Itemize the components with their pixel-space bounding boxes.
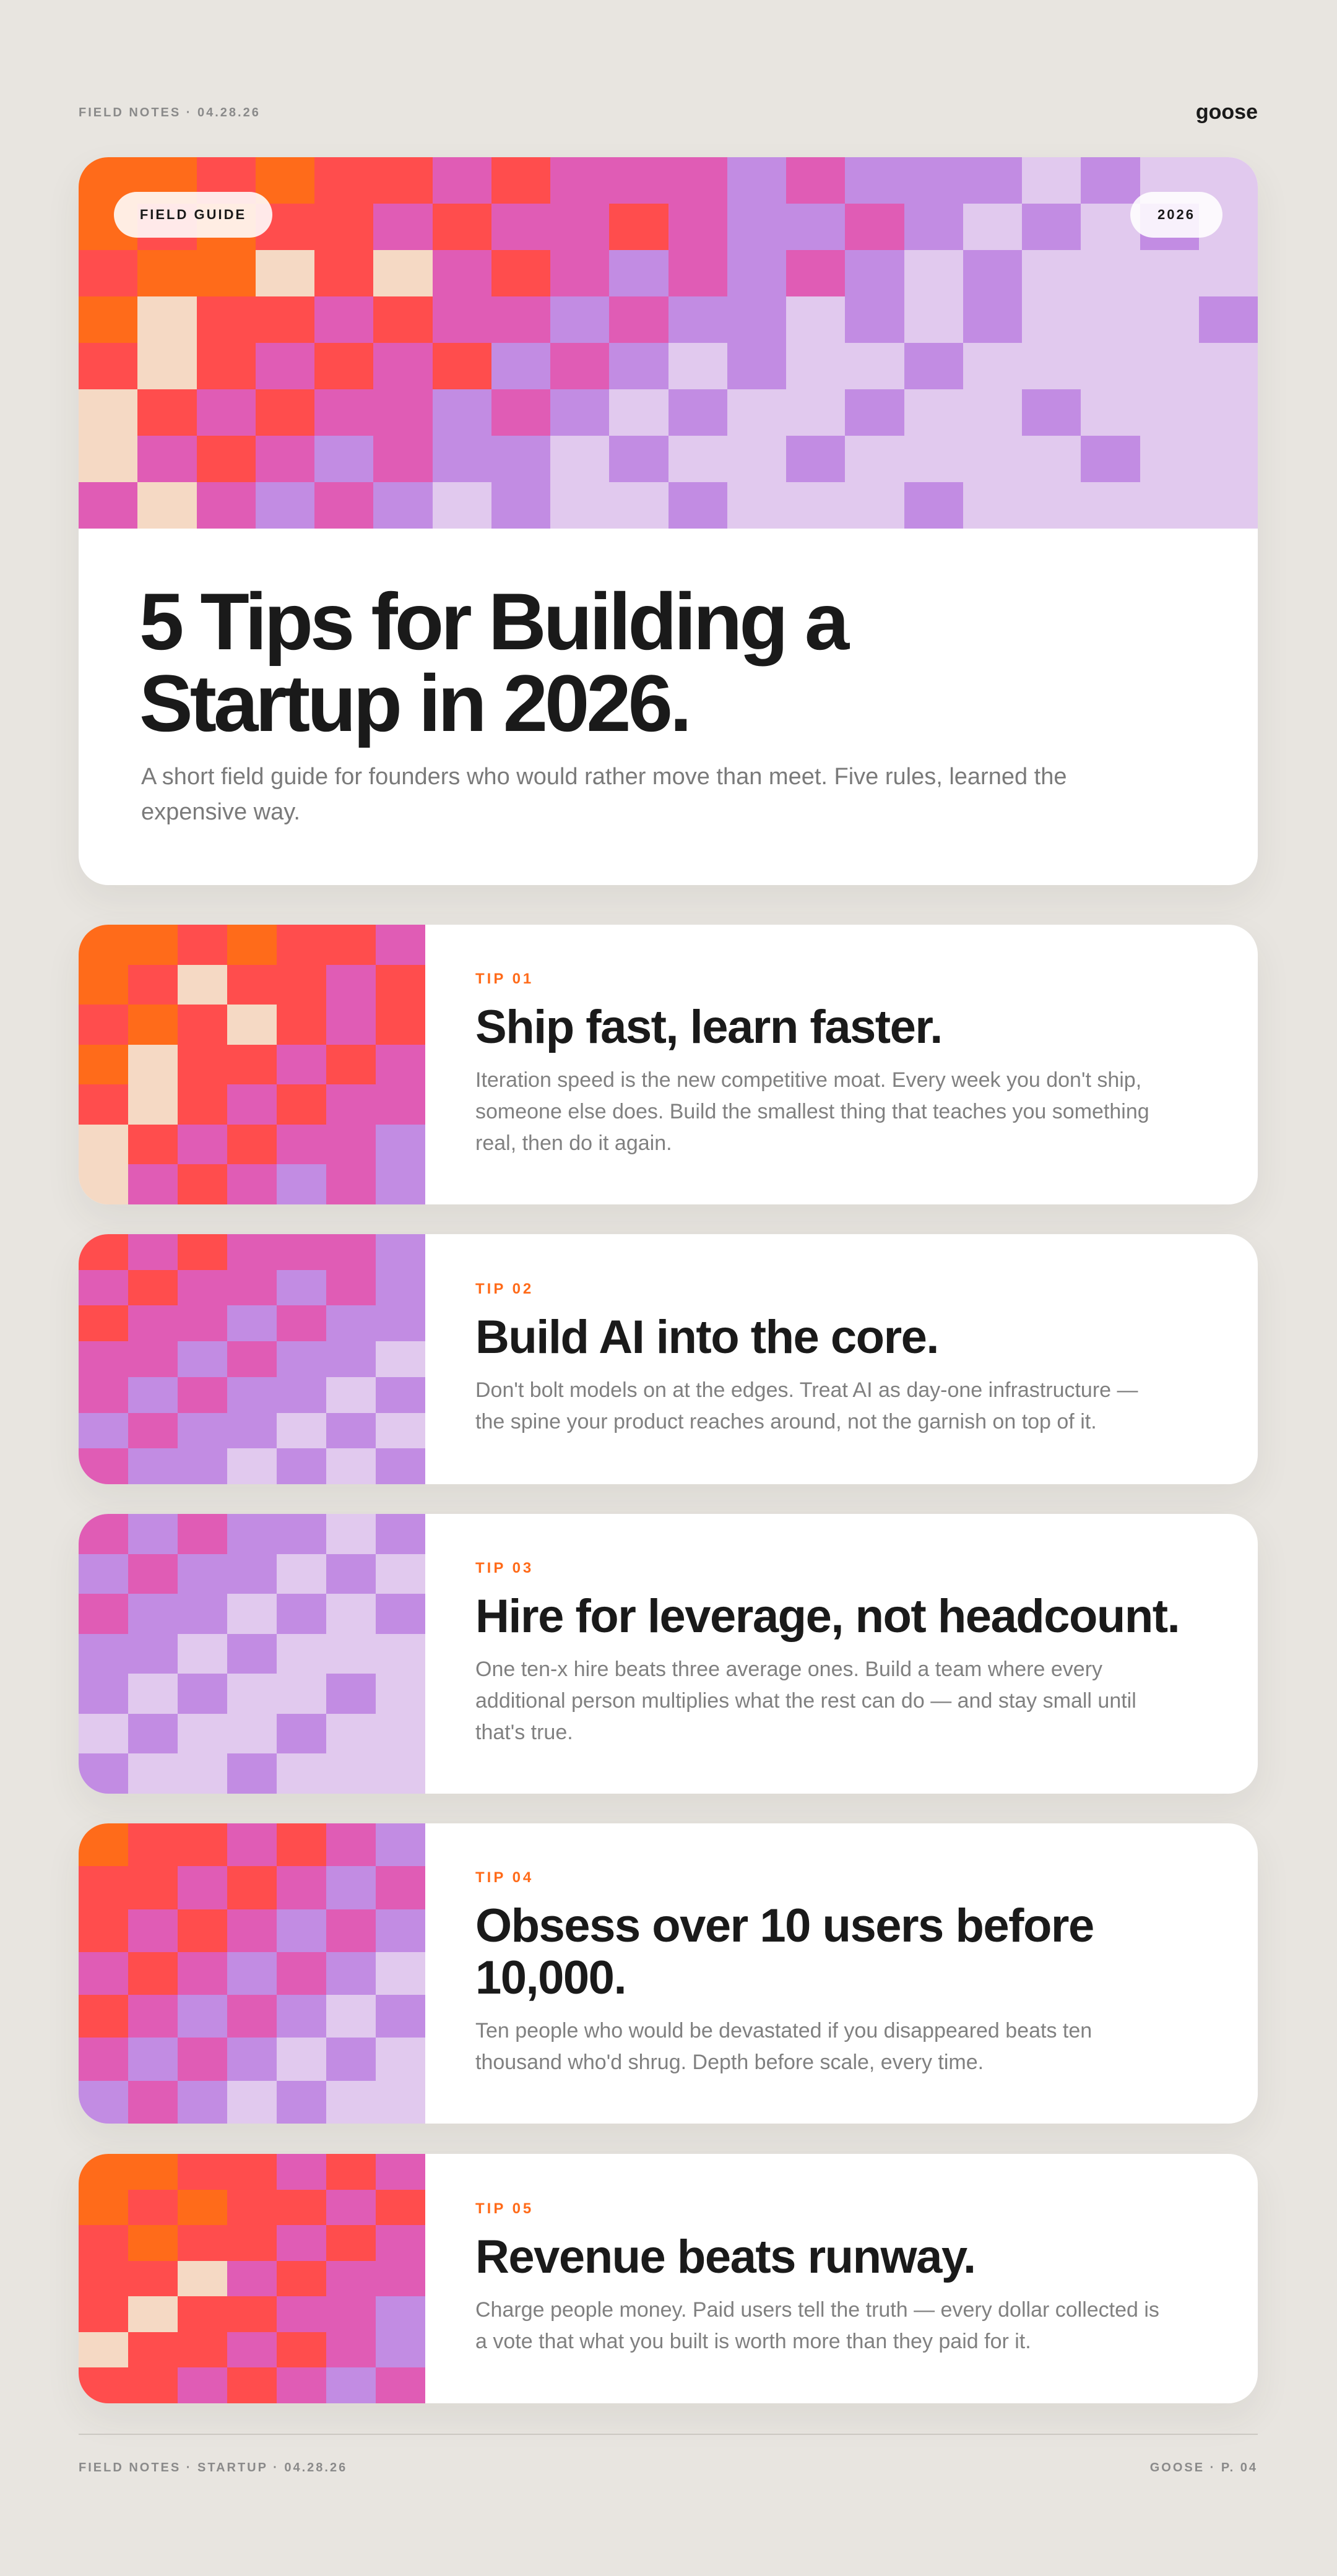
- tip 04 text: Ten people who would be devastated if you disappeared beats ten: [475, 2019, 1092, 2042]
- title: [139, 576, 850, 748]
- tip card 04: [79, 1823, 1258, 2124]
- tip 05 text: Charge people money. Paid users tell the truth — every dollar collected is: [475, 2297, 1159, 2321]
- hero card: [79, 157, 1258, 885]
- tip 04 mosaic: [79, 1823, 425, 2124]
- tip card 05: [79, 2154, 1258, 2403]
- header: field notes: FIELD NOTES · 04.28.26: [79, 106, 261, 119]
- tip 05 text: Revenue beats runway.: [475, 2231, 976, 2283]
- tip 02 text: [475, 1281, 1138, 1433]
- tip 04 text: Obsess over 10 users before: [475, 1899, 1094, 1952]
- tip 01 text: someone else does. Build the smallest thing that teaches you something: [475, 1099, 1149, 1123]
- hero pixel mosaic: [79, 157, 1258, 529]
- tip 04 text: TIP 04: [475, 1869, 534, 1885]
- tip 01 text: [475, 970, 1149, 1155]
- tip 01 text: real, then do it again.: [475, 1131, 672, 1155]
- tip 02 text: TIP 02: [475, 1281, 534, 1297]
- tip card 01: [79, 925, 1258, 1204]
- pill: 2026: [1130, 192, 1222, 238]
- tip 03 text: Hire for leverage, not headcount.: [475, 1589, 1179, 1643]
- tip 03 mosaic: [79, 1514, 425, 1794]
- pill: field guide: [114, 192, 272, 238]
- pill: field guide: FIELD GUIDE: [140, 207, 246, 222]
- tip 05 text: TIP 05: [475, 2200, 534, 2217]
- footer left: FIELD NOTES · STARTUP · 04.28.26: [79, 2461, 347, 2474]
- tip card 02: [79, 1234, 1258, 1484]
- title: 5 Tips for Building a: [139, 576, 846, 667]
- tip 01 text: Iteration speed is the new competitive moat. Every week you don't ship,: [475, 1068, 1141, 1092]
- tip 02 mosaic: [79, 1234, 425, 1484]
- tip 03 text: that's true.: [475, 1721, 573, 1744]
- pill: 2026: 2026: [1157, 207, 1195, 222]
- tip 03 text: [475, 1560, 1179, 1744]
- subtitle: expensive way.: [141, 799, 300, 825]
- subtitle: A short field guide for founders who would rather move than meet. Five rules, learned the: [141, 764, 1067, 790]
- tip 04 text: 10,000.: [475, 1951, 626, 2004]
- tip 03 text: One ten-x hire beats three average ones. Build a team where every: [475, 1658, 1102, 1681]
- tip card 03: [79, 1514, 1258, 1794]
- tip 05 mosaic: [79, 2154, 425, 2403]
- tip 02 text: Don't bolt models on at the edges. Treat AI as day-one infrastructure —: [475, 1378, 1138, 1402]
- footer right: GOOSE · P. 04: [1150, 2461, 1258, 2474]
- subtitle: [141, 764, 1067, 825]
- tip 04 text: [475, 1869, 1094, 2073]
- title: Startup in 2026.: [139, 658, 689, 748]
- tip 03 text: TIP 03: [475, 1560, 534, 1576]
- tip 02 text: Build AI into the core.: [475, 1311, 938, 1364]
- tip 01 text: Ship fast, learn faster.: [475, 1000, 942, 1053]
- tip 04 text: thousand who'd shrug. Depth before scale, every time.: [475, 2050, 984, 2073]
- tip 05 text: [475, 2200, 1159, 2353]
- tip 05 text: a vote that what you built is worth more than they paid for it.: [475, 2330, 1031, 2353]
- tip 02 text: the spine your product reaches around, not the garnish on top of it.: [475, 1410, 1097, 1433]
- tip 01 mosaic: [79, 925, 425, 1204]
- tip 01 text: TIP 01: [475, 970, 534, 987]
- header: goose logo: goose: [1196, 100, 1258, 124]
- tip 03 text: additional person multiplies what the rest can do — and stay small until: [475, 1688, 1136, 1712]
